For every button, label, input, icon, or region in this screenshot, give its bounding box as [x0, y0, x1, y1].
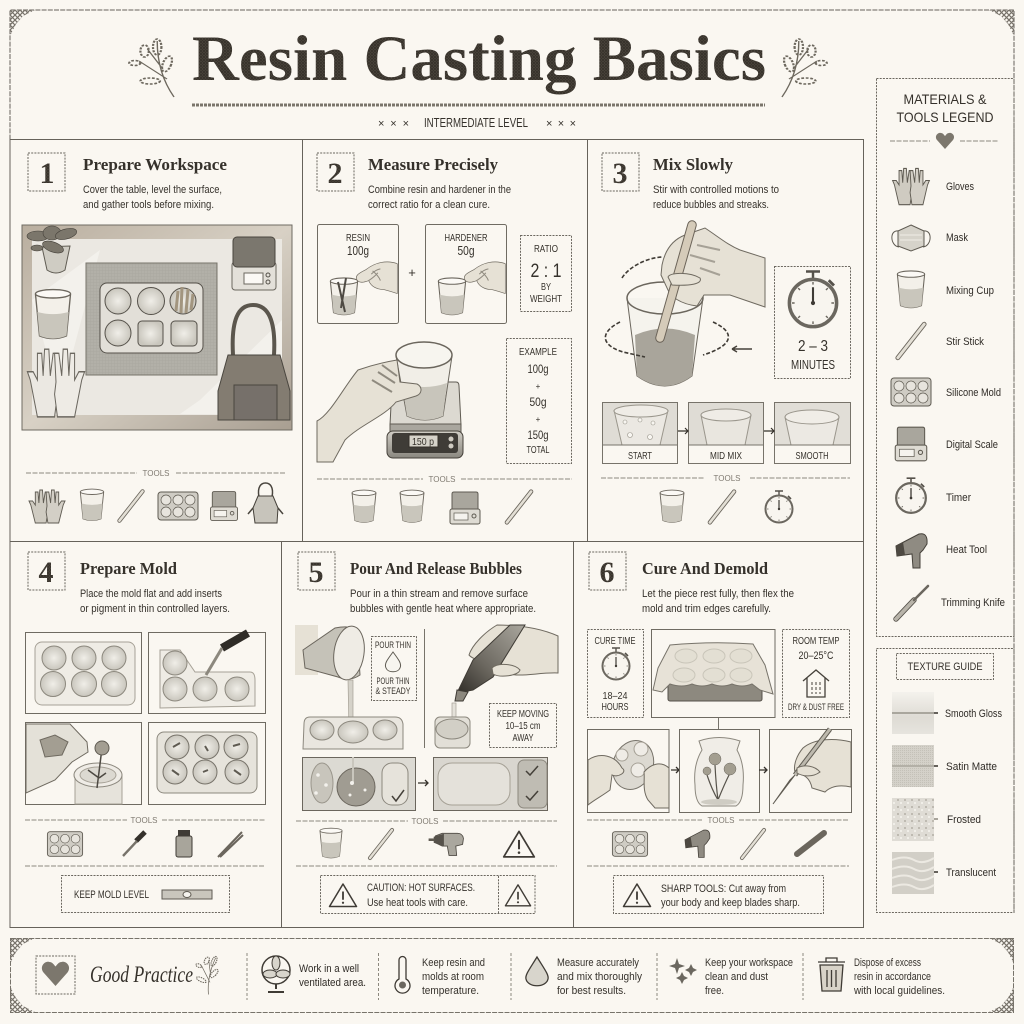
tools label: TOOLS — [429, 475, 455, 484]
legend: trimming knife: Trimming Knife — [941, 597, 1005, 609]
example callout: 150g — [528, 428, 548, 442]
icon: mold — [158, 492, 198, 520]
sprig left — [129, 39, 174, 97]
tools row — [317, 475, 572, 524]
demold hands image — [588, 730, 669, 812]
tip: measure: for best results. — [557, 985, 626, 997]
tip: clean — [669, 957, 793, 997]
legend title: MATERIALS & — [904, 91, 987, 107]
icon: cup — [80, 489, 104, 521]
bubbles after — [434, 758, 548, 810]
icon: stick — [370, 830, 392, 858]
tip: temperature: molds at room — [422, 971, 484, 983]
keep moving callout: 10–15 cm — [506, 721, 540, 732]
tools row — [26, 469, 286, 523]
tip: measure: and mix thoroughly — [557, 971, 642, 983]
tools label: TOOLS — [708, 816, 734, 825]
legend: heat tool: Heat Tool — [946, 544, 987, 556]
icon: mold — [612, 832, 648, 856]
image: pigment dropper — [148, 632, 266, 714]
legend: digital scale — [895, 427, 998, 461]
ratio callout: 2 : 1 — [530, 261, 562, 282]
arrow — [671, 767, 679, 773]
tip: temperature: temperature. — [422, 985, 479, 997]
swatch: smooth gloss: Smooth Gloss — [945, 708, 1002, 720]
note: keep mold level: KEEP MOLD LEVEL — [74, 889, 149, 901]
number badge 6 — [589, 552, 626, 590]
swatch: translucent: Translucent — [946, 867, 996, 879]
panel: step 3 mix slowly — [588, 140, 864, 542]
stage: mid mix — [688, 402, 764, 464]
stage frames — [602, 402, 850, 464]
icon: apron — [248, 483, 283, 523]
room temp callout: 20–25°C — [798, 650, 834, 662]
tip: measure — [526, 957, 642, 997]
panel: step 2 measure precisely — [302, 140, 588, 542]
icon: stick — [742, 830, 764, 858]
stage: mid mix: MID MIX — [710, 451, 742, 462]
heart badge — [36, 956, 75, 994]
hardener card: 50g — [458, 244, 475, 258]
caution box: Use heat tools with care. — [367, 897, 468, 909]
legend title: TOOLS LEGEND — [896, 109, 994, 125]
icon: bottle — [176, 830, 192, 857]
panel: step 4 prepare mold — [10, 542, 282, 928]
tip: dispose — [818, 957, 945, 997]
arrow — [678, 428, 688, 434]
heading: Prepare Workspace — [83, 155, 227, 174]
tip: dispose: resin in accordance — [854, 971, 931, 983]
keep moving callout — [490, 704, 556, 748]
panel: step 6 cure and demold — [574, 542, 864, 928]
icon: cup — [320, 828, 342, 858]
divider — [587, 865, 849, 867]
icon: marker — [797, 833, 824, 854]
example callout: EXAMPLE — [519, 346, 557, 358]
trimming image — [770, 729, 852, 812]
divider — [424, 629, 426, 748]
description: bubbles with gentle heat where appropriate. — [350, 603, 536, 615]
corner ornament top left — [10, 10, 35, 34]
hardener card: HARDENER — [444, 232, 488, 244]
covered mold image — [652, 630, 775, 718]
description: Let the piece rest fully, then flex the — [642, 588, 794, 600]
legend: trimming knife — [896, 586, 1005, 619]
legend: timer — [896, 478, 971, 513]
arrow — [764, 428, 774, 434]
icon: tweezers — [218, 832, 243, 857]
icon: gloves — [29, 490, 65, 523]
icon: heat gun — [685, 830, 710, 857]
icon: cup — [352, 490, 376, 522]
description — [80, 588, 230, 615]
heading: Pour And Release Bubbles — [350, 559, 523, 578]
tools row — [25, 816, 265, 857]
timer callout: 2 – 3 — [798, 338, 828, 355]
level marks right: × × × — [546, 118, 576, 130]
legend: stir stick: Stir Stick — [946, 336, 984, 348]
intermediate level: INTERMEDIATE LEVEL — [424, 116, 528, 130]
description: or pigment in thin controlled layers. — [80, 603, 230, 615]
resin card: 100g — [347, 244, 369, 258]
note: keep mold level — [62, 876, 230, 912]
ratio callout: BY — [541, 281, 551, 293]
swatch: satin matte — [892, 745, 997, 787]
tip: clean: clean and dust — [705, 971, 768, 983]
corner ornament top right — [989, 10, 1014, 34]
pour thin callout: POUR THIN — [375, 640, 411, 650]
heading: Mix Slowly — [653, 155, 734, 174]
timer callout: MINUTES — [791, 357, 835, 372]
sharp tools box: your body and keep blades sharp. — [661, 897, 800, 909]
header — [129, 23, 827, 130]
ratio callout: WEIGHT — [530, 293, 562, 305]
caution box: CAUTION: HOT SURFACES. — [367, 882, 475, 894]
tools label: TOOLS — [412, 817, 438, 826]
legend: mixing cup — [897, 271, 994, 308]
legend: silicone mold: Silicone Mold — [946, 387, 1001, 399]
tools row — [601, 474, 850, 522]
resin card: RESIN — [346, 232, 370, 244]
number badge 3: 3 — [612, 157, 628, 190]
description — [83, 184, 222, 211]
tip: measure: Measure accurately — [557, 957, 639, 969]
pour thin callout: & STEADY — [376, 686, 410, 696]
timer callout — [774, 266, 850, 378]
jar image — [680, 730, 760, 812]
sprig — [187, 950, 224, 995]
legend: timer: Timer — [946, 492, 971, 504]
legend: silicone mold — [891, 378, 1001, 406]
description — [368, 184, 511, 211]
scale and hand illustration: 150 p — [412, 436, 434, 448]
tip: dispose: Dispose of excess — [854, 957, 921, 969]
icon: scale — [450, 492, 480, 524]
mixing illustration — [605, 225, 765, 386]
swatch: frosted: Frosted — [947, 814, 981, 826]
cure time callout: HOURS — [602, 701, 628, 713]
sharp tools box — [614, 876, 824, 914]
heat gun illustration — [435, 625, 558, 748]
legend: gloves: Gloves — [946, 181, 974, 193]
heading: Measure Precisely — [368, 155, 499, 174]
divider — [25, 865, 265, 867]
example callout: TOTAL — [526, 444, 550, 456]
description: Cover the table, level the surface, — [83, 184, 222, 196]
number badge 5 — [298, 552, 335, 590]
keep moving callout: AWAY — [512, 733, 534, 744]
arrow — [418, 780, 428, 786]
tools row — [296, 817, 557, 858]
icon: heat gun — [429, 833, 463, 855]
number badge 1: 1 — [40, 157, 54, 190]
number badge 2: 2 — [328, 157, 342, 190]
footer banner: good practice — [10, 938, 1014, 1012]
number badge 6: 6 — [600, 556, 614, 589]
icon: warning — [504, 831, 534, 857]
heart divider — [890, 133, 998, 149]
dividers — [247, 953, 803, 1000]
pour illustration — [295, 624, 403, 749]
scale and hand illustration — [317, 342, 463, 462]
ratio callout: RATIO — [534, 243, 558, 255]
title: Resin Casting Basics — [192, 23, 766, 95]
stitched rule — [192, 104, 765, 106]
example callout: 100g — [528, 362, 548, 376]
cure time callout: CURE TIME — [594, 636, 636, 647]
icon: timer — [766, 491, 792, 522]
description: and gather tools before mixing. — [83, 199, 214, 211]
description — [653, 184, 779, 211]
icon: cup — [400, 490, 424, 522]
legend title — [896, 91, 994, 125]
legend: stir stick — [898, 324, 984, 358]
cure time callout: 18–24 — [602, 690, 628, 702]
sprig right — [782, 39, 827, 97]
description: Stir with controlled motions to — [653, 184, 779, 196]
swatch: satin matte: Satin Matte — [946, 761, 997, 773]
icon: scale — [210, 492, 238, 520]
tip: clean: free. — [705, 985, 724, 997]
ratio callout — [520, 236, 572, 312]
tip: temperature: Keep resin and — [422, 957, 485, 969]
legend: mixing cup: Mixing Cup — [946, 285, 994, 297]
example callout — [506, 338, 572, 464]
workspace illustration — [22, 225, 292, 430]
icon: mold — [47, 832, 83, 856]
tools row — [587, 816, 849, 858]
stage: start — [602, 402, 678, 464]
description: correct ratio for a clean cure. — [368, 199, 490, 211]
tip: ventilation: Work in a well — [299, 963, 359, 975]
stage: smooth: SMOOTH — [796, 451, 828, 462]
hardener card — [426, 224, 506, 324]
legend: digital scale: Digital Scale — [946, 439, 998, 451]
icon: dropper — [123, 832, 145, 856]
texture title — [896, 654, 994, 680]
number badge 1 — [28, 153, 65, 191]
description: reduce bubbles and streaks. — [653, 199, 769, 211]
icon: stick — [119, 491, 143, 521]
legend: heat tool — [896, 534, 987, 568]
description: mold and trim edges carefully. — [642, 603, 771, 615]
example callout: + — [536, 382, 541, 391]
number badge 2 — [317, 153, 354, 191]
divider — [296, 865, 557, 867]
caution box — [320, 876, 535, 914]
corner ornaments — [10, 938, 1014, 1012]
room temp callout — [782, 630, 850, 718]
bubbles before — [302, 757, 416, 810]
room temp callout: DRY & DUST FREE — [788, 702, 844, 713]
texture title: TEXTURE GUIDE — [908, 661, 982, 673]
heading: Prepare Mold — [80, 559, 177, 578]
connector — [718, 718, 720, 729]
tip: clean: Keep your workspace — [705, 957, 793, 969]
number badge 3 — [602, 153, 639, 191]
plus: + — [408, 265, 416, 280]
description: Place the mold flat and add inserts — [80, 588, 222, 600]
description — [350, 588, 536, 615]
cure time callout — [588, 630, 644, 718]
legend: mask: Mask — [946, 232, 968, 244]
icon: stick — [507, 492, 531, 522]
panel: step 5 pour and release bubbles — [282, 542, 574, 928]
script heading: Good Practice — [90, 962, 193, 987]
tools label: TOOLS — [131, 816, 157, 825]
resin card — [318, 224, 398, 324]
sharp tools box: SHARP TOOLS: Cut away from — [661, 883, 786, 895]
image: flower placement — [26, 722, 142, 804]
panel: materials legend — [876, 78, 1014, 636]
swatch: smooth gloss — [892, 692, 1002, 734]
pour thin callout: POUR THIN — [376, 676, 410, 686]
tools label: TOOLS — [714, 474, 740, 483]
icon: cup — [660, 490, 684, 522]
swatch: translucent — [892, 852, 996, 894]
tip: temperature — [395, 957, 485, 997]
room temp callout: ROOM TEMP — [792, 636, 840, 647]
image: empty mold — [26, 632, 142, 714]
tip: dispose: with local guidelines. — [853, 985, 945, 997]
example callout: + — [536, 415, 541, 424]
icon: stick — [710, 492, 734, 522]
number badge 5: 5 — [308, 556, 324, 589]
level marks left: × × × — [378, 118, 409, 130]
description — [642, 588, 794, 615]
panel: step 1 prepare workspace — [10, 140, 302, 542]
pour thin callout — [372, 636, 416, 700]
stage: start: START — [628, 451, 652, 462]
tip: ventilation: ventilated area. — [299, 977, 366, 989]
legend: gloves — [893, 168, 974, 205]
tools label: TOOLS — [143, 469, 169, 478]
legend: mask — [892, 225, 968, 251]
description: Combine resin and hardener in the — [368, 184, 511, 196]
arrow — [759, 767, 767, 773]
swatch: frosted — [892, 798, 981, 841]
number badge 4: 4 — [38, 556, 54, 589]
heading: Cure And Demold — [642, 559, 768, 578]
panel: texture guide — [876, 648, 1014, 912]
image: filled mold — [148, 722, 266, 804]
tip: ventilation — [262, 956, 366, 992]
stage: smooth — [774, 402, 850, 464]
number badge 4 — [28, 552, 65, 590]
keep moving callout: KEEP MOVING — [497, 709, 549, 720]
example callout: 50g — [530, 395, 546, 409]
description: Pour in a thin stream and remove surface — [350, 588, 528, 600]
